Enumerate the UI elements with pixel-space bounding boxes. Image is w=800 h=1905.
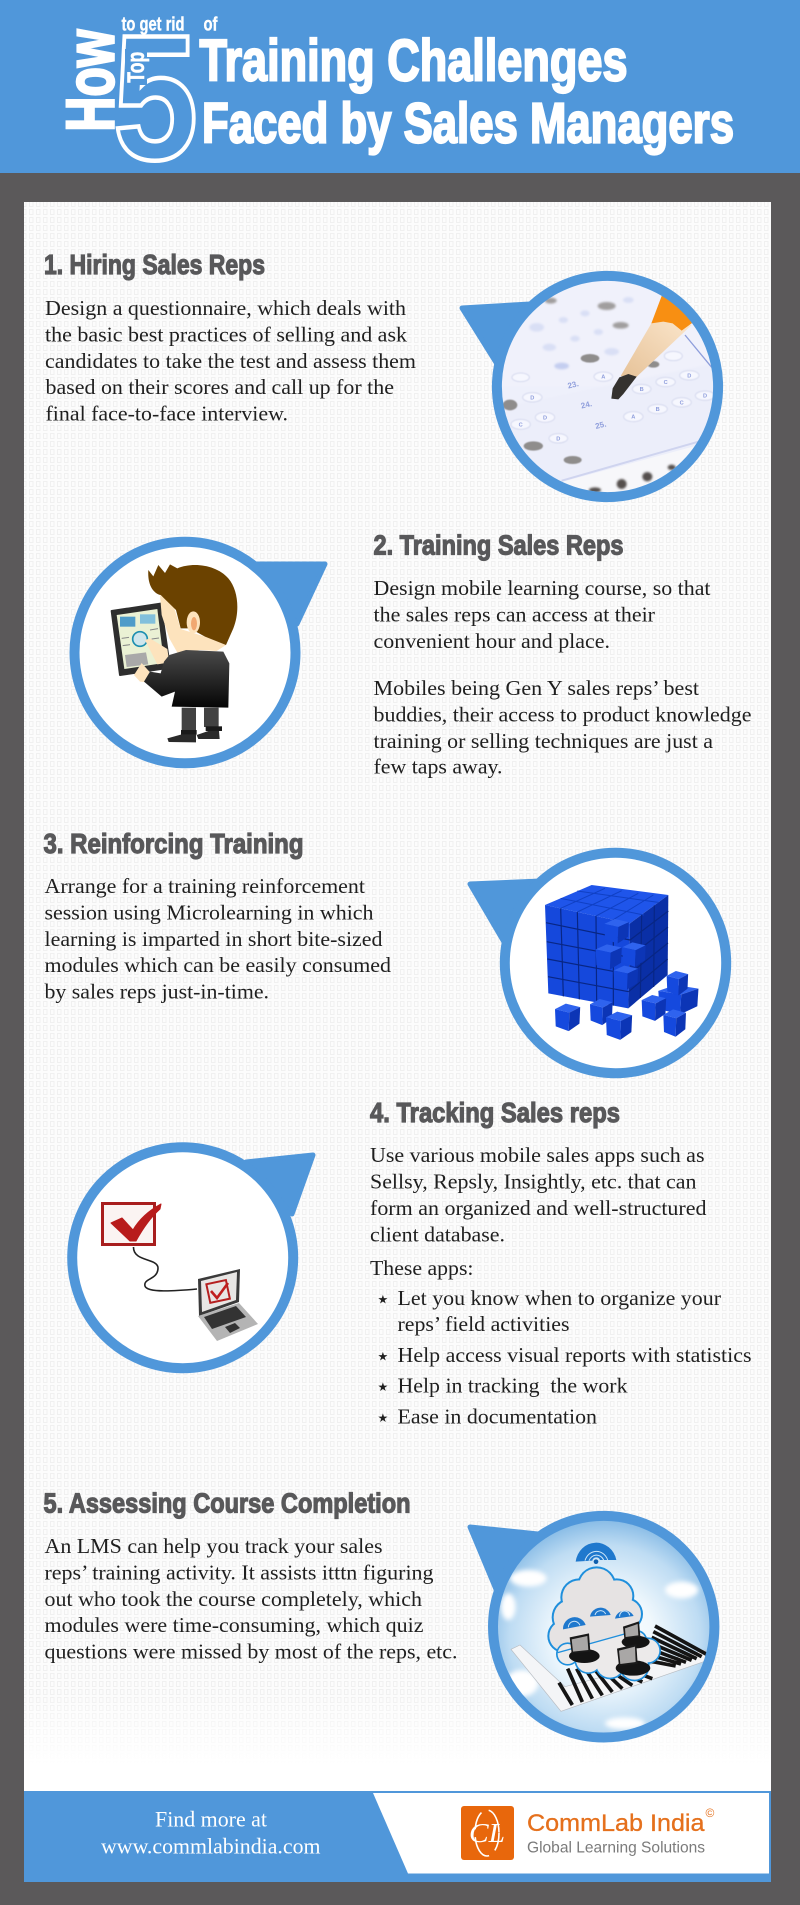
legs and shoes — [182, 708, 196, 732]
text block 3: learning is imparted in short bite-sized — [44, 927, 383, 951]
text block 5: reps’ training activity. It assists itttn figuring — [44, 1560, 434, 1584]
footer text: find more: Find more at — [155, 1807, 267, 1832]
speech bubble with test sheet photo: B — [656, 407, 660, 413]
bullet list: ★ — [378, 1411, 388, 1425]
speech bubble with test sheet photo — [462, 270, 730, 510]
speech bubble with test sheet photo: 24. — [580, 399, 593, 411]
cable — [133, 1247, 197, 1291]
bullet list: ★ — [378, 1292, 388, 1306]
text block 5: out who took the course completely, which — [44, 1587, 423, 1611]
text block 1: Design a questionnaire, which deals with — [45, 296, 407, 320]
speech bubble with blue cubes — [470, 853, 726, 1073]
text block 2: Mobiles being Gen Y sales reps’ best — [374, 676, 699, 700]
speech bubble with test sheet photo: C — [680, 400, 684, 406]
pencil — [611, 293, 694, 399]
speech bubble with cloud and bar chart — [470, 1516, 718, 1737]
text block 2: Design mobile learning course, so that — [374, 576, 711, 600]
section 3: reinforcing training — [44, 828, 726, 1073]
text block 5: questions were missed by most of the reps, etc. — [44, 1640, 458, 1664]
text block 1 — [45, 296, 416, 425]
logo: CommLab India: CommLab India — [527, 1810, 705, 1837]
bullet list: ★ — [378, 1350, 388, 1364]
speech bubble with test sheet photo: D — [556, 436, 560, 442]
speech bubble with test sheet photo: C — [519, 422, 523, 428]
text block 3: Arrange for a training reinforcement — [44, 874, 365, 898]
speech bubble with test sheet photo: D — [543, 415, 547, 421]
title numeral: 5: 5 — [113, 0, 198, 197]
speech bubble with test sheet photo: D — [530, 395, 534, 401]
text block 4: Sellsy, Repsly, Insightly, etc. that can — [370, 1170, 697, 1194]
cube block faces — [545, 885, 668, 923]
speech bubble with man using tablet — [74, 542, 325, 763]
logo: CommLab India: © — [706, 1806, 714, 1820]
title word: Top: Top — [123, 52, 150, 83]
text block 4 — [370, 1143, 707, 1280]
logo: CommLab India: CL — [469, 1818, 505, 1848]
jacket — [144, 650, 229, 708]
text block 4: form an organized and well-structured — [370, 1196, 707, 1220]
bullet list: Help access visual reports with statistics — [398, 1343, 752, 1367]
cloud base — [556, 1630, 661, 1681]
speech bubble with test sheet photo: 25. — [594, 420, 607, 431]
text block 3: by sales reps just-in-time. — [44, 980, 269, 1004]
bullet list: reps’ field activities — [398, 1312, 570, 1336]
speech bubble with test sheet photo: D — [687, 373, 691, 379]
speech bubble with test sheet photo: C — [664, 380, 668, 386]
text block 4: Use various mobile sales apps such as — [370, 1143, 704, 1167]
logo: CommLab India — [461, 1806, 714, 1860]
bullet list: ★ — [378, 1380, 388, 1394]
footer text: website: www.commlabindia.com — [101, 1833, 320, 1858]
logo: CommLab India: Global Learning Solutions — [527, 1840, 705, 1857]
loose cubes — [555, 1004, 580, 1031]
text block 3 — [44, 874, 392, 1004]
text block 2 — [374, 576, 752, 779]
speech bubble with test sheet photo: 23. — [567, 379, 580, 391]
text block 1: candidates to take the test and assess them — [45, 349, 416, 373]
cloud backdrop — [547, 1566, 643, 1653]
text block 4: These apps: — [370, 1256, 474, 1280]
bullet list: Ease in documentation — [398, 1405, 598, 1429]
heading 5: 5. Assessing Course Completion — [44, 1488, 410, 1519]
text block 5: An LMS can help you track your sales — [44, 1534, 382, 1558]
bubble ring — [497, 276, 718, 497]
speech bubble with checkbox and laptop — [72, 1147, 313, 1368]
wifi domes — [563, 1543, 634, 1629]
text block 2: the sales reps can access at their — [374, 602, 655, 626]
text block 1: the basic best practices of selling and ask — [45, 322, 408, 346]
section 5: assessing course completion — [44, 1488, 718, 1737]
bullet list: Help in tracking the work — [398, 1374, 628, 1398]
cube block grid — [546, 905, 668, 1006]
text block 5: modules were time-consuming, which quiz — [44, 1613, 424, 1637]
section 1: hiring sales reps — [44, 249, 730, 510]
heading 2: 2. Training Sales Reps — [374, 530, 624, 561]
bubble ring — [493, 1516, 714, 1737]
tablet — [112, 604, 170, 675]
bar chart sheet — [511, 1626, 707, 1711]
text block 2: convenient hour and place. — [374, 629, 610, 653]
heading 3: 3. Reinforcing Training — [44, 828, 304, 859]
title line 1: Training Challenges — [200, 28, 628, 94]
speech bubble with test sheet photo: A — [601, 375, 605, 381]
raised cubes — [604, 919, 629, 944]
laptops — [569, 1621, 650, 1676]
head and hands — [160, 595, 226, 654]
heading 4: 4. Tracking Sales reps — [370, 1097, 620, 1128]
title word: of: of — [204, 14, 218, 36]
text block 1: final face-to-face interview. — [46, 401, 288, 425]
text block 4: client database. — [370, 1222, 505, 1246]
speech bubble with test sheet photo: D — [703, 394, 707, 400]
speech bubble with test sheet photo: A — [631, 415, 635, 421]
text block 1: based on their scores and call up for the — [46, 375, 394, 399]
header banner — [0, 0, 800, 197]
speech bubble with test sheet photo: B — [640, 387, 644, 393]
text block 3: session using Microlearning in which — [44, 900, 374, 924]
title words: to get rid: to get rid — [122, 14, 184, 36]
bullet list: Let you know when to organize your — [398, 1286, 721, 1310]
section 4: tracking sales reps — [72, 1097, 751, 1429]
white logo panel — [373, 1793, 769, 1874]
text block 2: few taps away. — [374, 755, 502, 779]
text block 2: training or selling techniques are just a — [374, 729, 714, 753]
icon: red checkbox — [102, 1204, 161, 1244]
section 2: training sales reps — [74, 530, 752, 779]
text block 2: buddies, their access to product knowledge — [374, 703, 752, 727]
icon: laptop — [198, 1269, 258, 1341]
heading 1: 1. Hiring Sales Reps — [44, 249, 265, 280]
footer band — [24, 1791, 771, 1882]
bullet list — [378, 1286, 752, 1429]
text block 3: modules which can be easily consumed — [44, 953, 392, 977]
text block 5 — [44, 1534, 458, 1664]
